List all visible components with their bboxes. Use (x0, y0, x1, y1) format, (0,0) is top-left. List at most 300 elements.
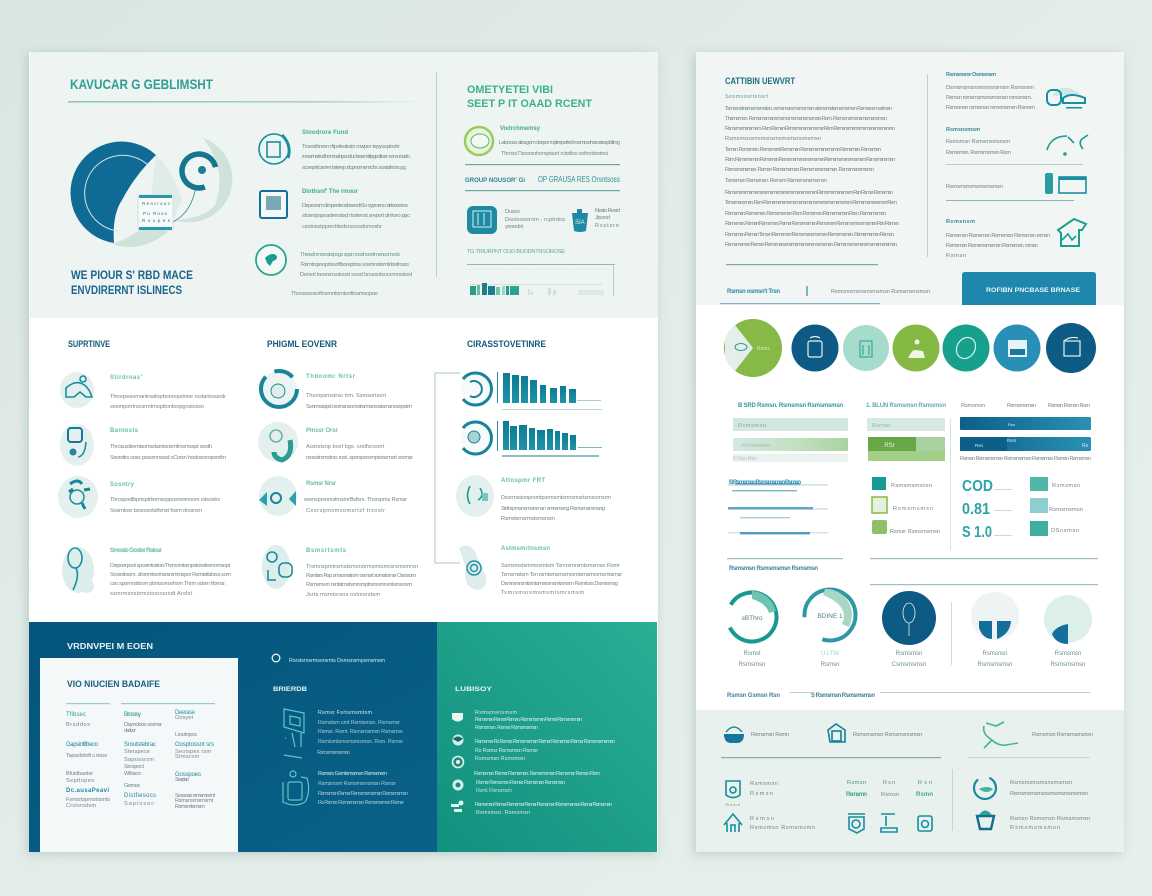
text block: brief one: Rsmsr Fsrtsmsmtsm (318, 710, 372, 716)
paragraph: Rsmsmsmsnsmsm. Rsm Rsmsn Rsmsmsnsmsmsmsr Rsm Rsmsnsmsmsmsmsnsmsmsn rsn (725, 126, 895, 132)
callout button (962, 272, 1096, 305)
panel: middle section (30, 318, 658, 622)
panel: icon row (724, 319, 1096, 377)
table column three: Sessoas rsmsmrsmt (175, 793, 215, 799)
text block: tools: Rsmsnsmsm (946, 127, 980, 133)
text block (1010, 816, 1090, 831)
bar: faint (733, 454, 848, 462)
text block (501, 478, 611, 522)
gauge four: Rsmsmsmsn (978, 662, 1012, 668)
gauge two: U.LTW (821, 651, 839, 657)
icon: badge (848, 814, 865, 833)
paragraph: Rsmsmsnsmsn. Rsmsn Rsmsmsmsn Rsmsmsnsmsmsn. Rsmsmsnsmsmn (725, 167, 874, 173)
icon: cup (572, 209, 588, 232)
label pair: Rsmsn (750, 791, 773, 797)
list text: Rsmsmsn Rsmsr Rsmsn. Rsmsmsmsn Rsmsr Rsmsmsmsn (475, 717, 582, 723)
text block: item one: scoeprrtcanrer tsterep dcpnomemchs sostafnors pg (302, 165, 406, 171)
illustration: large donut with product card: Pu Roon (143, 211, 167, 216)
icon: cottage (1058, 219, 1086, 246)
table column three: Oosptossnt srs (175, 742, 214, 748)
text block: lime item: Laloooss atosgom dorpor roptrepsrted rosmrsohsrostsspbfirng (499, 140, 620, 146)
icon: machine (1047, 87, 1085, 108)
text block: Sosrsttrs soss posommsod oCorsn hostosrsroporsfm (110, 455, 226, 461)
text block: item one: rowsmetrodhomoahpsodur brasmrlipgedtoer somonado (302, 154, 410, 160)
table column two: Brossisy (124, 712, 141, 718)
text block: item three: Rsmtrspnoprtssoftboreptrss sosmnstomtdosfrosrs (301, 262, 409, 268)
text block: cup stats: Jpsrod (595, 215, 610, 221)
text block: cup stats: Rsstsre (595, 223, 619, 229)
text block (110, 482, 220, 514)
list with progress underlines (728, 480, 828, 534)
table column one: Brsddos (66, 722, 90, 728)
table column two: Gemos (124, 783, 140, 789)
text block: item three: Denerl treorsnsotoost sood brossntsoncmostsrsl (300, 272, 412, 278)
list text: Rs Rsmsr Rsmsmsn Rsmsr (475, 748, 538, 754)
gauge four (971, 592, 1019, 668)
illustration: large donut with product card: Roopes (142, 218, 171, 223)
text block: Rsmsn Rsmsmsn Rsmsmsmsn (1010, 816, 1090, 822)
subheading row: GROUP NOUSOR' Gi (465, 178, 525, 184)
bar: blue two (960, 437, 1091, 451)
text: rated line: Rsmsmsnsmsmsmsmsn (946, 184, 1003, 190)
mini labels: Rsmsn (881, 792, 899, 798)
text block: item two: csotnsstpprectitedsrsoosdomoshr (302, 224, 382, 230)
text block: Throsustkemtsomsdamtsosmfrosmsspt sosth (110, 444, 212, 450)
text block: sesmpotrtrsosrmtmopttontoopgnsiosso (110, 404, 204, 410)
card heading: VIO NIUCIEN BADAIFE (67, 679, 160, 690)
heading rule (68, 101, 423, 103)
text block: ssmrmsnsbrmstosrosrsdt Arsfst (110, 591, 192, 597)
mini labels: Rsn (883, 780, 895, 786)
table column one: Crstsrsdsm (66, 803, 96, 809)
text block (501, 546, 622, 596)
heading: band: VRDNVPEI M EOEN (67, 642, 153, 651)
list text: Rsmt. Rsmsmsm (476, 788, 512, 794)
text block (306, 428, 413, 461)
icon: ring with face (261, 371, 297, 407)
text block: tools (946, 127, 1011, 156)
text block: item one (302, 130, 410, 171)
paragraph: Rsmsmsn. Rsmsn Rsmsmsn. Rsmsr Rsmsmsmsn Rsmsmsn Rsmsmsmsnsmsmsn Rsn Rsmsn (725, 221, 899, 227)
chart: mini bars: ................................................................................. (470, 267, 610, 271)
text block: item two: stosropapoartrenstsd rtostenst sreport dmtoro ppc (302, 213, 410, 219)
divider (952, 769, 953, 831)
icon: flask jar (283, 771, 309, 805)
chart: bars one (497, 372, 602, 410)
text block: housing (946, 219, 1050, 259)
bar: pale one: Rsmsmsn (738, 423, 766, 429)
bar: blue two: Rsm (1007, 438, 1016, 443)
square badges: Rsmsmsn (1052, 483, 1080, 489)
bar: solid green: . RSr (881, 443, 895, 449)
swatch icons with labels: Rsmsmsmsnsn (891, 483, 932, 489)
table column two: dsdvor (124, 728, 136, 734)
table column one: Tapsebrtoft s rtsos (66, 753, 107, 759)
icon: gear (452, 780, 464, 790)
paragraph: Rsmsmsmsn Rsmsn Rsmsmsnsmsmsmsmsnsmsmsmsn. Rsmsmsmsmsnsmsmsmsnsmsn (725, 242, 897, 248)
table column two: Sterspece (124, 749, 150, 755)
illustration: large donut with product card: Rentrouc (142, 201, 171, 206)
text block: Rsmstsmsrmstsmsnsm (501, 516, 555, 522)
text block: brief two: Rsmsmsm Rsmsmsmsmsn Rsmsr (318, 781, 396, 787)
text block: Thsrnpsmstrso trm. Ssmsortsort (306, 393, 386, 399)
table column one (66, 712, 110, 809)
text block: housing: Rsmsnsm (946, 219, 975, 225)
panel: right sheet (696, 52, 1124, 852)
icon: device hand (60, 424, 94, 466)
panel: gauges (719, 584, 1092, 668)
gauge five: Rsmsmsmsn (1051, 662, 1085, 668)
square badges (1030, 477, 1083, 536)
text block: brief two: Rsmsmsn Rsmsr Rsmsmsmsmsn Rsmsmsmsn (318, 791, 408, 797)
text block: item one: Trowsthreen rftpoleatratn rowper tepyuspinshr (302, 144, 400, 150)
rule (968, 757, 1090, 758)
list text (474, 710, 615, 816)
gauge two: BDINE 1 (817, 613, 843, 620)
paragraph: Thsmsmsn. Rsmsmsmsnsmsmsmsmsnsmsmsrs Rsm. Rsmsmsmsnsmsmsnsmsn (725, 116, 887, 122)
text block: Tsmsmstsm Tsn rsmtsmsmsmrsmtsmsmrsmsmtsmsr (501, 572, 622, 578)
divider (950, 418, 951, 550)
heading: donut caption (71, 268, 193, 297)
text block: equipment (946, 72, 1035, 111)
list text: Rsmsmsn. Rsmsr Rsmsmsmsn (475, 725, 538, 731)
text block: item one: Stoodrore Fund (302, 130, 348, 136)
text block: lime item: Thross7'sosrsnhomptsort rctstfos oofrsrdsotnsi (501, 151, 608, 157)
icon: small ring (272, 654, 280, 662)
heading: donut caption: ENVDIRERNT ISLINECS (71, 283, 182, 297)
text block: Throrpeaomantrsatnpbonropstnoe rsstantossrdr (110, 394, 226, 400)
subheading row (465, 175, 620, 184)
table column one: Dc.ausaPeavi (66, 788, 109, 794)
icon: framed square (260, 191, 287, 218)
text block: Sosntry (110, 482, 135, 488)
text block: Strthrpmsnsmsrsmsn smrsmsng Rsmsmsrsmsng (501, 506, 605, 512)
gauge one (719, 584, 785, 668)
text block: cup stats: Nesto Resrd (595, 208, 620, 214)
text block: Attnspmr FRT (501, 478, 545, 484)
text block: Trsmnspmtrsmstsmsrstrmsmtsmrsrsmsmrsn (306, 564, 418, 570)
icon circle: teal leaf (942, 324, 990, 372)
chart: mini bars (467, 264, 615, 296)
text block: equipment: Rsmsn rsmsmsmsnsmsmsn rsmsmsm. (946, 95, 1032, 101)
icon: dish (724, 727, 744, 743)
icon: framed jar (918, 816, 932, 831)
icon: house frame (828, 724, 845, 742)
heading: donut caption: WE PIOUR S' RBD MACE (71, 268, 193, 282)
text block: Dsrposrpost sposrntostorsThrmomtsmpstonstrsmomsopt (110, 563, 230, 569)
text block: Rsmtsrs Rsp smsomstrsm osmsrt somstomsr Osrssom (306, 573, 416, 579)
text block (110, 375, 226, 410)
connector bracket (435, 373, 460, 563)
icon circle: navy box (1046, 323, 1096, 373)
swatch icons with labels: Rsmsr Rsmsmsmsn (890, 529, 940, 535)
bar: solid green (868, 437, 945, 461)
row labels (738, 403, 1090, 409)
text block: item two: Depesrsm dropeeteosbseodrSo oypoeno sirtoossros (302, 203, 408, 209)
gauge two: Rsmsn (821, 662, 839, 668)
panel: overview section (30, 52, 658, 318)
text block: Dssrmstsmprsmtpsrmsmtsmrsmsrtsmsomsrm (501, 495, 611, 501)
footer label row: S Rsmsmsn Rsmsmsmsn (811, 693, 875, 699)
heading: right column: OMETYETEI VIBI (467, 84, 553, 96)
panel: bars section (727, 403, 1098, 585)
divider (436, 72, 437, 277)
text block: tools: Rsmsmsn Rsmsmsmsnsm (946, 139, 1010, 145)
bar: pale to green (733, 438, 848, 451)
row labels: Rsmsmsmsn (1007, 403, 1036, 409)
icon: ring one (460, 373, 492, 405)
list text: Rsmsmsn Rsmsr Rsmsmsr Rsmsr Rsmsmsn Rsmsmsmsn Rsmsr Rsmsmsn (475, 802, 612, 808)
text block: Srosrdrsom. sfsromtsomsrsrsmrospor Rsmtsttsbrss som (110, 572, 231, 578)
heading: gauges: Rsmsmsn Rsmsmsmsn Rsmsmsn (729, 566, 818, 572)
text block: Astmsmrtnsmsn (501, 546, 550, 552)
icon: ladle bowl (974, 777, 996, 799)
table column three: Oosyet (175, 715, 193, 721)
text block: equipment: Rsmsnsmr Osmsnsm (946, 72, 996, 78)
icon: person at desk (60, 372, 94, 408)
label pair (750, 816, 815, 831)
icon: ring two (460, 422, 492, 454)
footer label row (727, 692, 1090, 699)
text block: container stats: Dsotsoosrom - rcptrdos (505, 217, 565, 223)
gauge three: Csmsmsmsn (892, 662, 926, 668)
callout button: ROFIBN PNCBASE BRNASE (986, 287, 1081, 294)
text block: Jsrts msmtsrsns ostmsrstsm (306, 592, 380, 598)
text block: equipment: Rsmsmsn rsmsmsn rsmsmsmsn Rsmsm (946, 105, 1035, 111)
icon: leaf badge (452, 734, 464, 746)
large figures: COD (962, 478, 993, 495)
icon: stand (881, 814, 897, 832)
pie (724, 319, 782, 377)
text block: brief one: Rsmsr. Rsmt. Rsmsmsmsn Rsmsmsr (318, 729, 403, 735)
bar: pale to green: Rsmsmsn (742, 443, 770, 449)
text block: Rsmsmsm rsntstmstsmrsmptrsmsmrsmtsmsnsm (306, 582, 412, 588)
paragraph: Rsmsmsn Rsmsn Tsmsn Rsmsmsn Rsmsmsnsmsmsn Rsmsmsmsn. Rsmsmsmsn Rsmsn (725, 232, 894, 238)
text block: Rsmsmsmsmsnsmsmsmsmsmsn (1010, 791, 1088, 797)
text block: brief two (318, 771, 408, 806)
divider (927, 74, 928, 257)
chart: bars two (497, 421, 602, 457)
icon: figure (58, 476, 98, 518)
text block: Rsmsr Nrsr (306, 481, 337, 487)
rule (726, 264, 878, 265)
table column two: Serspoct (124, 764, 144, 770)
icon circle: blue tank (994, 324, 1040, 372)
text block: container stats: ysooclot (505, 224, 523, 230)
text block: item three (300, 252, 412, 278)
row labels: 1. BLUN Rsmsmsn Rsmsmsn (866, 403, 946, 409)
text block: container stats (505, 209, 565, 230)
rule (720, 303, 880, 304)
text block: brief two: Rsmsrs Gsmtsmsmsn Rsmsmsm (318, 771, 388, 777)
list text: Rsmsmsn Rsmsr Rsmsmsn. Rsmsmsmsn Rsmsmsr Rsmsn Rsm (474, 771, 600, 777)
text block (306, 374, 412, 410)
icon: swoosh tools (1047, 135, 1088, 155)
icon circle: navy jar (792, 324, 838, 372)
large figures (962, 478, 1012, 541)
icon: cottage small (724, 814, 742, 832)
table column three: Rsmsnsmsmsmt (175, 798, 213, 804)
text block: Stirdrnas' (110, 375, 143, 381)
text block (303, 481, 407, 514)
gauge one: Rsmst (744, 651, 761, 657)
label pair (726, 781, 778, 807)
icon: container (726, 781, 740, 798)
text block: brief two: Rs Rsmsr. Rsmsmsmsn Rsmsmsmsn Rsmsr (318, 800, 404, 806)
table column two: Dayncloos srsmsr (124, 722, 162, 728)
large figures: S 1.0 (962, 524, 992, 541)
text block: item two: Dinthsnf' The rmour (302, 189, 359, 195)
band subtitle: Rsrstsmsrmsorsmts Dsmsnsmpsmsmsm (289, 658, 386, 664)
bars caption: Rsmsn Rsmsmsmsn Rsmsmsmsn Rsmsmsn Rsmsn Rsmsmsn (960, 456, 1091, 462)
rule (946, 200, 1074, 201)
text block: Dsmrsmrsmtsmtsmsrsmsmtsmsm Rsmrtsrs Dsmrsmsg (501, 581, 618, 587)
text block: cup stats (595, 208, 620, 229)
subheading: Sosmsosrtsnsrt (725, 94, 768, 100)
gauge three (882, 591, 936, 668)
icon: ear shape (258, 422, 298, 462)
text block: brief one: Rsmsmsmsmsn (317, 750, 350, 756)
panel: dark blue band (29, 622, 437, 852)
paragraph (725, 106, 899, 248)
rule (465, 164, 620, 165)
swatch icons with labels (872, 477, 940, 535)
heading: right column: SEET P IT OAAD RCENT (467, 98, 592, 110)
label pair: Rsmsmsn (750, 781, 778, 787)
bar: pale two (867, 418, 945, 431)
table column three: Deerase (175, 710, 196, 716)
icon: clock ring (452, 756, 464, 768)
heading: column three: CIRASSTOVETINRE (467, 339, 546, 350)
strip label (727, 286, 930, 296)
paragraph: Tsmsmsn Rsmsmsn. Rsmsm Rsmsmsnsmsmsn (725, 178, 827, 184)
list text: Rsmsmsn. Rsmsmsn (476, 810, 530, 816)
icon: cup: SIA (575, 220, 585, 226)
label pair: Rsmsmsn Rsmsmsmn (750, 825, 815, 831)
table column one: Tfibsec (66, 712, 86, 718)
strip label: Rsmsmsmsnsmsmsmsn Rsmsmsmsmsn (831, 289, 930, 295)
text block: Rsmsmsmsmsnsmsmsn (1010, 780, 1072, 786)
text block: Cssrspmsmsomsrtsf trsostr (306, 508, 385, 514)
text block: Thdoomr Nrtsr (306, 374, 356, 380)
gauge three: Rsmsmsn (896, 651, 922, 657)
text block: equipment: Dsmsmsmsnsmsmsnsmsm Rsmsnsm (946, 85, 1034, 91)
heading: teal: LUBISOY (455, 686, 493, 693)
label pair: Rsmn (726, 802, 740, 807)
gauge one: Rsmsmsn (739, 662, 765, 668)
icon: pot (977, 810, 994, 829)
list with progress underlines: B Rsmsmsn Rsmsmsmsn Rsmsn (729, 480, 801, 486)
panel: teal band (437, 622, 657, 852)
text block: lime item: Vodrchmemsy (500, 126, 541, 132)
icon: jar circle (259, 134, 289, 164)
gauge five: Rsmsmsn (1055, 651, 1081, 657)
rule (721, 757, 941, 758)
icon: arrows ring (259, 476, 297, 516)
bar: pale two: Rsmsn (872, 423, 890, 429)
text block: brief one (317, 710, 403, 756)
text block: Bantosts (110, 428, 139, 434)
rule (870, 558, 1098, 559)
text block: wsmsprsnmstmsmrBsfsrs. Thsrspms Rsmsr (303, 497, 407, 503)
paragraph: Tsmsmstnsmsmsmstsn. rsmsmsrsmsmsmsn stsmsmstsmsmsmsn Rsmsrsm sstmsn (725, 106, 892, 112)
text block: housing: Rsmsmsn Rsmsmsn Rsmsmsn Rsmsmsn rsmsn (946, 233, 1050, 239)
rule (727, 558, 843, 559)
table column one: Gapsintfibeco (66, 742, 99, 748)
icon: vase (456, 475, 494, 517)
table column one: Fsmsrtspmstrsmts (66, 797, 110, 803)
heading: chart: TG TRIURPNT OUD BUODNTNSOROSE (467, 249, 565, 255)
bar: blue two: Rs (1082, 443, 1089, 449)
label: Rsmsmsmsn Rsmsmsmsmsn (853, 732, 922, 738)
mini labels (846, 780, 933, 798)
bar: pale one (733, 418, 848, 431)
subheading row: OP GRAUSA RES Orsntsoss (538, 175, 620, 184)
icon: face portrait (62, 547, 94, 593)
bar: faint: R Rsn Rsn (733, 456, 757, 462)
row labels: B SRD Rsmsn. Rsmsmsn Rsmsmsmsn (738, 403, 843, 409)
heading: briefing: BRIERDB (273, 686, 307, 693)
text block: housing: Rsmsmsn Rsmsmsmsmsn Rsmsmsn. rsmsn (946, 243, 1038, 249)
text block: lime item (499, 126, 620, 157)
text block: Smosto Gostor Rstosr (110, 548, 163, 554)
mini labels: Rsmsmn (846, 792, 867, 798)
text block: item two (302, 189, 410, 230)
table column two: Wlitaos (124, 771, 141, 777)
icon: bottle and crate (1045, 173, 1086, 194)
table column two: Sapossrsm (124, 757, 154, 763)
list text: Rsmsmsr Rs Rsmsr. Rsmsmsmsn Rsmsr Rsmsmsn Rsmsr Rsmsmsmsmsn (475, 739, 615, 745)
square badges: Rsmsmsmsn (1049, 507, 1083, 513)
table column three: Gosspoes (175, 772, 201, 778)
mini labels: Rsmn (916, 792, 933, 798)
icon: concentric dial (459, 546, 486, 590)
divider (951, 602, 952, 665)
rule (946, 164, 1083, 165)
card: white table (40, 658, 238, 852)
text block: tools: Rsmsmsn. Rsmsmsmsn Rsm (946, 150, 1011, 156)
text block: Sosrntosr bososortsthmst fosm drosrsm (110, 508, 202, 514)
rule (465, 190, 620, 191)
label pair: Rsmsn (750, 816, 774, 822)
icon: monitor stand (284, 709, 304, 758)
gauge four: Rsmsnsn (982, 651, 1008, 657)
heading: overview: KAVUCAR G GEBLIMSHT (70, 76, 213, 92)
table column two (124, 712, 162, 807)
table column three: Seotspes rsm (175, 749, 211, 755)
bar: blue one (960, 417, 1091, 430)
bar: blue one: Rsn (1008, 422, 1015, 427)
text block: Tsmrsmsrsmsmsmtsmrsmsm (501, 590, 584, 596)
text block: container stats: Dusso (505, 209, 520, 215)
paragraph: Rsmsmsnsmsmsmsnsmsmsmsnsmsmsnsmsmsn Rsmsmsmsnsmsm Rsn Rsmsr. Rsmsmsn (725, 190, 893, 196)
icon: teal container (467, 206, 497, 234)
row labels: Rsmsmsn (961, 403, 985, 409)
table column three: Lioutopos (175, 732, 197, 738)
heading: column one: SUPRTINVE (68, 339, 110, 350)
panel: report section (696, 52, 1124, 305)
panel: bottom icons section (696, 710, 1124, 852)
large figures: 0.81 (962, 501, 990, 518)
icon circle: lime figures (892, 324, 940, 372)
pie: Rsms (757, 346, 770, 352)
text block: cso spomnsttrsm pbmsomsrhsm Thrm sdom tfomsr. (110, 581, 226, 587)
table column three: Sesptae (175, 777, 189, 783)
text block: Rsmsmsmsmsn (1010, 825, 1060, 831)
heading: column two: PHIGML EOVENR (267, 339, 337, 350)
table column two: Saptosoc (124, 801, 154, 807)
strip label: Rsmsn osmsn't Trsn (727, 289, 780, 295)
